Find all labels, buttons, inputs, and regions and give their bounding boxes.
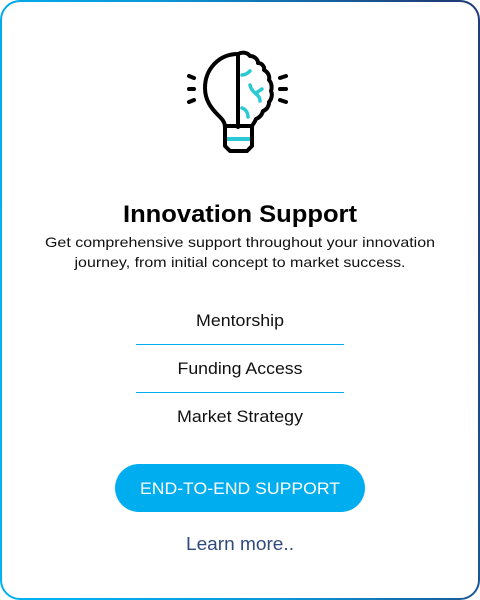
button: END-TO-END SUPPORT [140, 479, 340, 498]
button [115, 464, 365, 512]
description text [45, 234, 435, 270]
item: funding access: Funding Access [178, 360, 302, 378]
icon: half bulb half brain [189, 53, 286, 151]
title: Innovation Support [123, 201, 357, 228]
description text: journey, from initial concept to market success. [73, 254, 405, 270]
feature list [136, 312, 344, 426]
description text: Get comprehensive support throughout your innovation [45, 234, 435, 250]
item: mentorship: Mentorship [196, 312, 284, 330]
item: market strategy: Market Strategy [177, 408, 304, 426]
link: learn more: Learn more.. [186, 534, 294, 554]
